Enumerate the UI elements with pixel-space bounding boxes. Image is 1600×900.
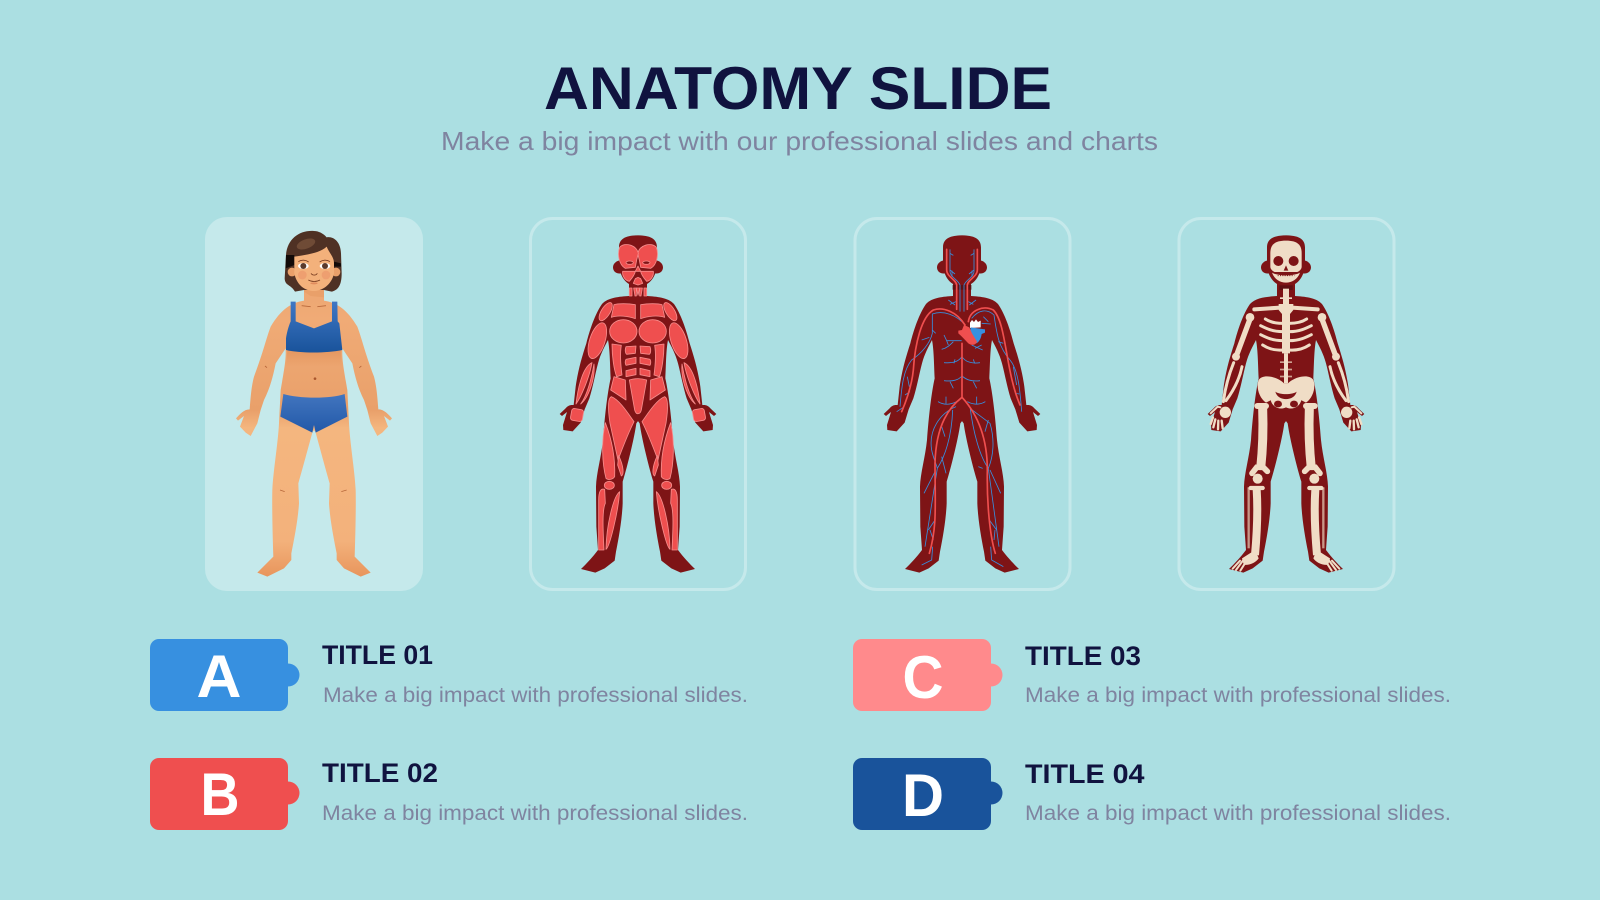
skull xyxy=(1270,241,1302,272)
arteries xyxy=(902,249,1020,553)
text block: title 04: Make a big impact with professional slides. xyxy=(1025,802,1451,825)
icon: heart xyxy=(958,319,985,345)
illustration: blood vessels xyxy=(884,235,1040,573)
illustration: skeleton xyxy=(1208,235,1364,573)
body details xyxy=(265,306,361,492)
text block: title 04 xyxy=(1025,759,1451,825)
badge C: C xyxy=(902,644,944,711)
panel: muscular system xyxy=(530,218,746,590)
text block: title 03: Make a big impact with professional slides. xyxy=(1025,684,1451,707)
title: ANATOMY SLIDE xyxy=(544,55,1052,122)
face xyxy=(294,247,334,291)
text block: title 03 xyxy=(1025,641,1451,707)
hair xyxy=(285,231,342,292)
pelvis center xyxy=(1271,383,1301,409)
subtitle: Make a big impact with our professional slides and charts xyxy=(441,126,1158,156)
spine xyxy=(1271,289,1301,409)
text block: title 04: TITLE 04 xyxy=(1025,759,1144,789)
text block: title 03: TITLE 03 xyxy=(1025,641,1141,671)
badge D: D xyxy=(902,762,944,829)
ears xyxy=(288,268,296,276)
bikini top xyxy=(286,302,342,352)
text block: title 02: TITLE 02 xyxy=(322,758,438,788)
veins xyxy=(897,249,1022,567)
panel: circulatory system xyxy=(855,218,1070,590)
illustration: woman xyxy=(236,231,392,577)
badge B: B xyxy=(200,761,240,828)
text block: title 01: Make a big impact with professional slides. xyxy=(323,684,748,707)
panel: skeletal system xyxy=(1179,218,1394,590)
illustration: muscles xyxy=(560,235,716,573)
bikini bottom xyxy=(280,394,347,433)
text block: title 01: TITLE 01 xyxy=(322,640,433,670)
badge A: A xyxy=(196,643,242,710)
panel: human body xyxy=(205,217,423,591)
badge A xyxy=(150,639,300,711)
text block: title 01 xyxy=(322,640,748,707)
text block: title 02 xyxy=(322,758,748,825)
badge D xyxy=(853,758,1002,830)
torso shading xyxy=(286,350,342,367)
text block: title 02: Make a big impact with professional slides. xyxy=(322,802,748,825)
badge C xyxy=(853,639,1002,711)
badge B xyxy=(150,758,300,830)
